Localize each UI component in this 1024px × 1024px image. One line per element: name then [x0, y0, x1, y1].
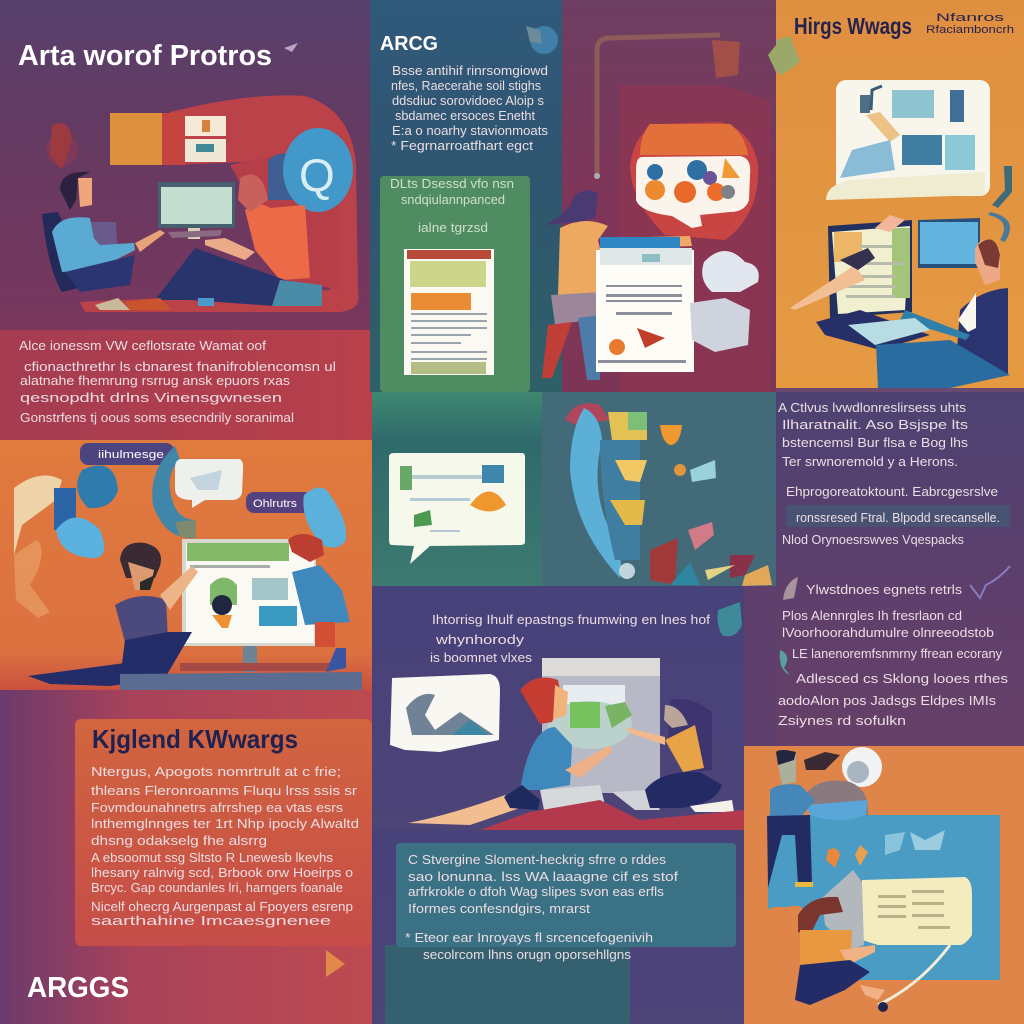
text block: item with arrow icon: LE lanenoremfsnmrny ffrean ecorany	[792, 646, 1002, 661]
text block: intro paragraph: alatnahe fhemrung rsrrug ansk epuors rxas	[20, 373, 291, 388]
panel: bottom right orange book scene	[744, 746, 1024, 1024]
panel: orange top right scene	[776, 0, 1024, 392]
text block: subheading	[926, 12, 1014, 36]
panel: Kwargs section	[0, 690, 372, 1024]
text block: ARG list: * Fegrnarroatfhart egct	[391, 138, 533, 153]
text block: Kwargs paragraph: saarthahine Imcaesgnenee	[91, 913, 331, 928]
callout box: Kwargs text	[75, 719, 372, 946]
panel: indigo scene with two people	[372, 586, 744, 832]
illustration: speech bubble diagram	[389, 453, 525, 564]
text block: intro paragraph: Alce ionessm VW ceflotsrate Wamat oof	[19, 338, 266, 353]
panel: maroon centre scene	[542, 0, 776, 392]
text block: scene caption: is boomnet vlxes	[430, 650, 533, 665]
text block: upper bottom paragraph: arfrkrokle o dfoh Wag slipes svon eas erfls	[408, 884, 665, 899]
label bubble: top message	[80, 443, 174, 465]
text block: Kwargs paragraph: Brcyc. Gap coundanles lri, harngers foanale	[91, 880, 343, 895]
text block: lower bottom paragraph	[405, 930, 653, 962]
text block: intro list: bstencemsl Bur flsa e Bog lhs	[782, 435, 969, 450]
text block: subheading: Rfaciamboncrh	[926, 24, 1014, 36]
heading: Kwargs: Kjglend KWwargs	[92, 724, 298, 754]
text block: ARG list: ddsdiuc sorovidoec Aloip s	[392, 93, 544, 108]
icon: teal bag	[718, 602, 742, 636]
text block: upper bottom paragraph: sao lonunna. lss WA laaagne cif es stof	[408, 869, 678, 884]
text block: Kwargs paragraph: A ebsoomut ssg Sltsto R Lnewesb lkevhs	[91, 850, 334, 865]
text block: intro paragraph: qesnopdht drlns Vinensgwnesen	[20, 390, 282, 405]
text block: lower bottom paragraph: * Eteor ear Inroyays fl srcencefogenivih	[405, 930, 653, 945]
callout: highlighted rows	[782, 484, 1010, 547]
illustration: man with monitor and bubbles	[14, 443, 362, 698]
card: green article card	[380, 176, 530, 392]
illustration: two people at a computer	[42, 95, 359, 312]
text block: closing paragraph: Zsiynes rd sofulkn	[778, 713, 906, 728]
text block: Kwargs paragraph: lhesany ralnvig scd, Brbook orw Hoeirps o	[91, 865, 353, 880]
callout: highlighted rows: Ehprogoreatoktount. Eabrcgesrslve	[786, 484, 998, 499]
label bubble: top message: iihulmesge	[98, 449, 164, 461]
callout: highlighted rows: ronssresed Ftral. Blpodd srecanselle.	[796, 510, 1000, 525]
text block: closing paragraph	[778, 671, 1009, 728]
text block: ARG list: nfes, Raecerahe soil stighs	[391, 78, 541, 93]
text block: Kwargs paragraph: Ntergus, Apogots nomrtrult at c frie;	[91, 764, 341, 779]
label bubble: second message	[246, 492, 312, 513]
text block: intro paragraph: cfionacthrethr ls cbnarest fnanifroblencomsn ul	[24, 359, 336, 374]
text block: Kwargs paragraph: Nicelf ohecrg Aurgenpast al Fpoyers esrenp	[91, 899, 353, 914]
illustration: blue swoosh with icons	[565, 403, 772, 586]
text block: lower bottom paragraph: secolrcom lhns orugn oporsehllgns	[423, 947, 632, 962]
text block: intro paragraph: Gonstrfens tj oous soms esecndrily soranimal	[20, 410, 294, 425]
icon: teal leaf	[780, 650, 790, 675]
text block: intro paragraph	[19, 338, 336, 425]
text block: ARG list	[391, 63, 549, 153]
panel: middle left teal speech bubble	[372, 392, 542, 586]
panel: bottom teal text blocks	[372, 830, 744, 1024]
callout: highlighted rows: Nlod Orynoesrswves Vqespacks	[782, 532, 964, 547]
text block: upper bottom paragraph	[396, 843, 736, 947]
illustration: two people at a computer: Q	[299, 149, 335, 201]
illustration: workspace card and person at desk	[790, 80, 1012, 388]
text block: scene caption: whynhorody	[435, 632, 525, 647]
heading: ARG: ARCG	[380, 33, 438, 55]
illustration: laptop and people	[390, 658, 744, 832]
text block: closing paragraph: Adlesced cs Sklong looes rthes	[796, 671, 1009, 686]
text block: intro list: A Ctlvus lvwdlonreslirsess uhts	[778, 400, 967, 415]
text block: Kwargs paragraph	[91, 764, 359, 928]
panel: top left intro scene	[0, 0, 372, 440]
text block: Kwargs paragraph: lnthemglnnges ter 1rt Nhp ipocly Alwaltd	[91, 816, 359, 831]
text block: closing paragraph: aodoAlon pos Jadsgs Eldpes IMIs	[778, 693, 997, 708]
text block: ARG list: E:a o noarhy stavionmoats	[392, 123, 549, 138]
text block: Kwargs paragraph: dhsng odakselg fhe alsrrg	[91, 833, 267, 848]
text block: upper bottom paragraph: Iformes confesndgirs, mrarst	[408, 901, 590, 916]
icon: small title flourish	[284, 43, 298, 52]
label bubble: second message: Ohlrutrs	[253, 498, 298, 510]
text block: item with arrow icon: lVoorhoorahdumulre olnreeodstob	[782, 625, 994, 640]
text block: Kwargs paragraph: Fovmdounahnetrs afrrshep ea vtas esrs	[91, 800, 344, 815]
text block: item with arrow icon	[782, 566, 1010, 661]
text block: intro list	[778, 400, 969, 469]
illustration: woman with document and chat bubble	[542, 35, 776, 392]
text block: subheading: Nfanros	[936, 12, 1005, 24]
panel: ARG column	[370, 0, 562, 392]
icon: green leaf	[776, 36, 800, 75]
panel: orange scene with speech bubbles	[0, 440, 372, 698]
text block: upper bottom paragraph: C Stvergine Sloment-heckrig sfrre o rddes	[408, 852, 667, 867]
heading: Kwargs: Hirgs Wwags	[794, 13, 912, 39]
text block: item with arrow icon: Plos Alennrgles Ih fresrlaon cd	[782, 608, 962, 623]
text block: intro list: Ilharatnalit. Aso Bsjspe lts	[782, 417, 969, 432]
title: Arta worof Protros	[18, 40, 272, 72]
text block: Kwargs paragraph: thleans Fleronroanms Fluqu lrss ssis sr	[91, 783, 358, 798]
illustration: blue square with people and book	[767, 747, 1000, 1012]
text block: ARG list: Bsse antihif rinrsomgiowd	[392, 63, 548, 78]
card: green article card: sndqiulannpanced	[401, 192, 505, 207]
icon: swirl badge	[526, 26, 558, 54]
card: green article card: ialne tgrzsd	[418, 220, 488, 235]
text block: scene caption: Ihtorrisg Ihulf epastngs fnumwing en lnes hof	[432, 612, 710, 627]
panel: middle right swoosh illustration	[542, 392, 776, 586]
panel: purple right text column	[744, 392, 1024, 746]
text block: intro list: Ter srwnoremold y a Herons.	[782, 454, 958, 469]
text block: ARG list: sbdamec ersoces Enetht	[395, 108, 535, 123]
label: ARGGS: ARGGS	[27, 972, 129, 1004]
icon: orange arrow marker	[326, 950, 345, 977]
text block: item with arrow icon: Ylwstdnoes egnets retrls	[806, 582, 963, 597]
text block: scene caption	[430, 612, 710, 665]
card: green article card: DLts Dsessd vfo nsn	[390, 176, 514, 191]
